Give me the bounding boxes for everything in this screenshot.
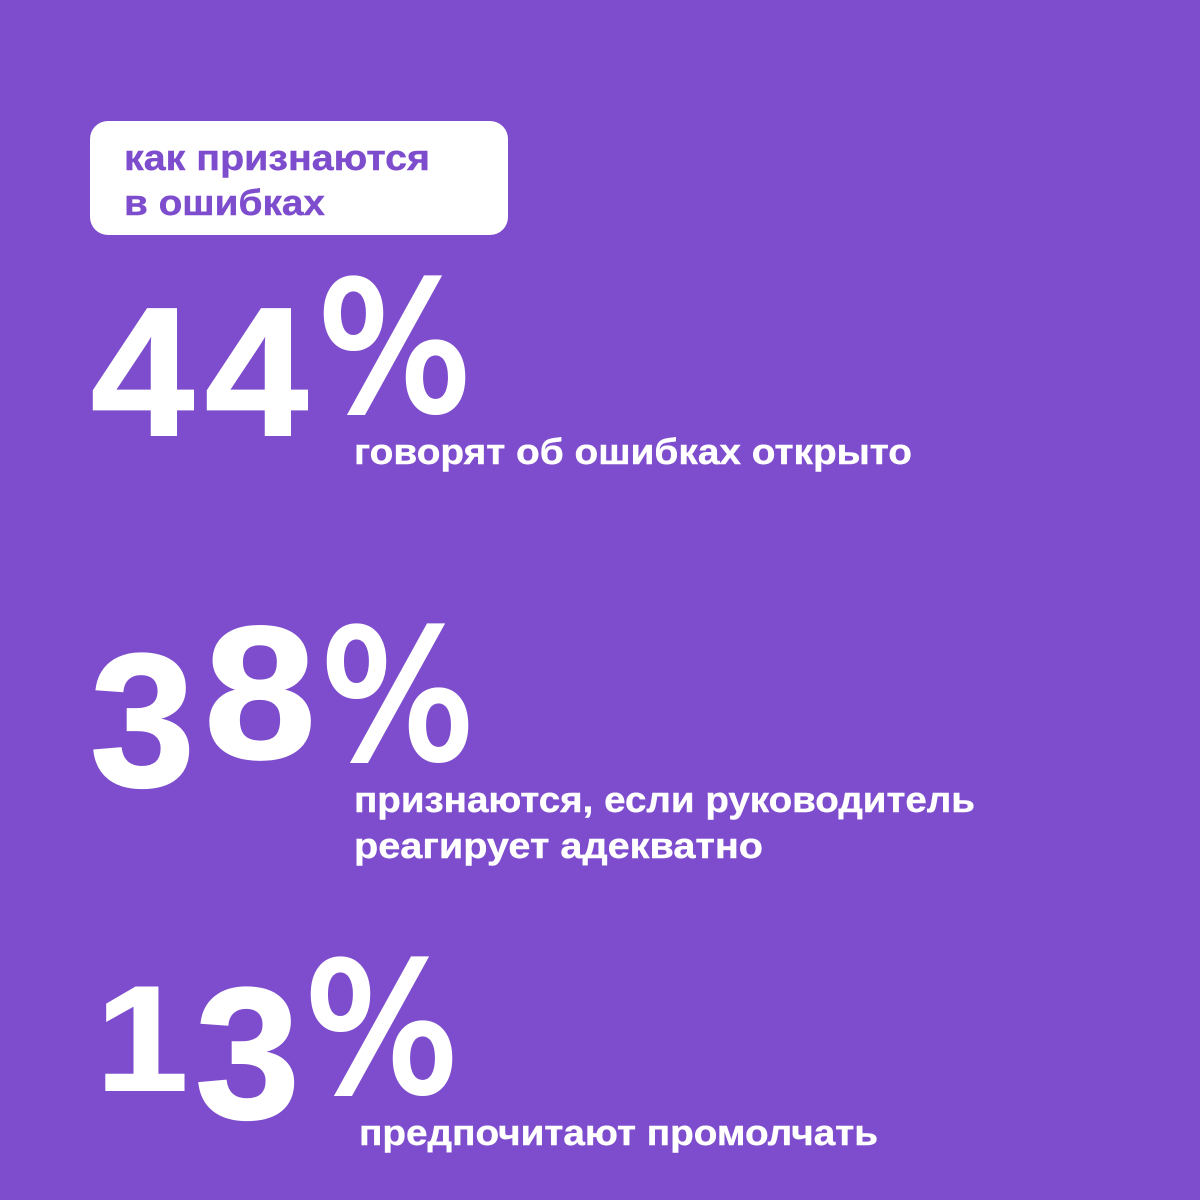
stat: 13 percent: предпочитают промолчать (359, 1112, 878, 1153)
stat: 13 percent: 3 (195, 949, 300, 1158)
stat: 44 percent: говорят об ошибках открыто (354, 431, 912, 472)
stat: 38 percent: признаются, если руководитель (354, 779, 975, 820)
stat: 44 percent: 4 (91, 269, 194, 474)
stat: 44 percent: 4 (205, 269, 308, 474)
heading badge: в ошибках (124, 182, 325, 223)
stat: 38 percent: реагирует адекватно (354, 825, 763, 866)
stat: 38 percent (90, 588, 975, 866)
stat: 44 percent (91, 245, 912, 474)
stat: 13 percent: 1 (96, 955, 188, 1122)
stat: 13 percent (96, 926, 878, 1158)
stat: 38 percent: % (320, 593, 475, 800)
heading badge: как признаются (124, 137, 430, 178)
stat: 13 percent: % (304, 926, 459, 1133)
stat: 44 percent: % (317, 245, 472, 452)
stat: 38 percent: 8 (204, 588, 316, 799)
stat: 38 percent: 3 (90, 615, 195, 827)
heading badge (90, 121, 508, 235)
